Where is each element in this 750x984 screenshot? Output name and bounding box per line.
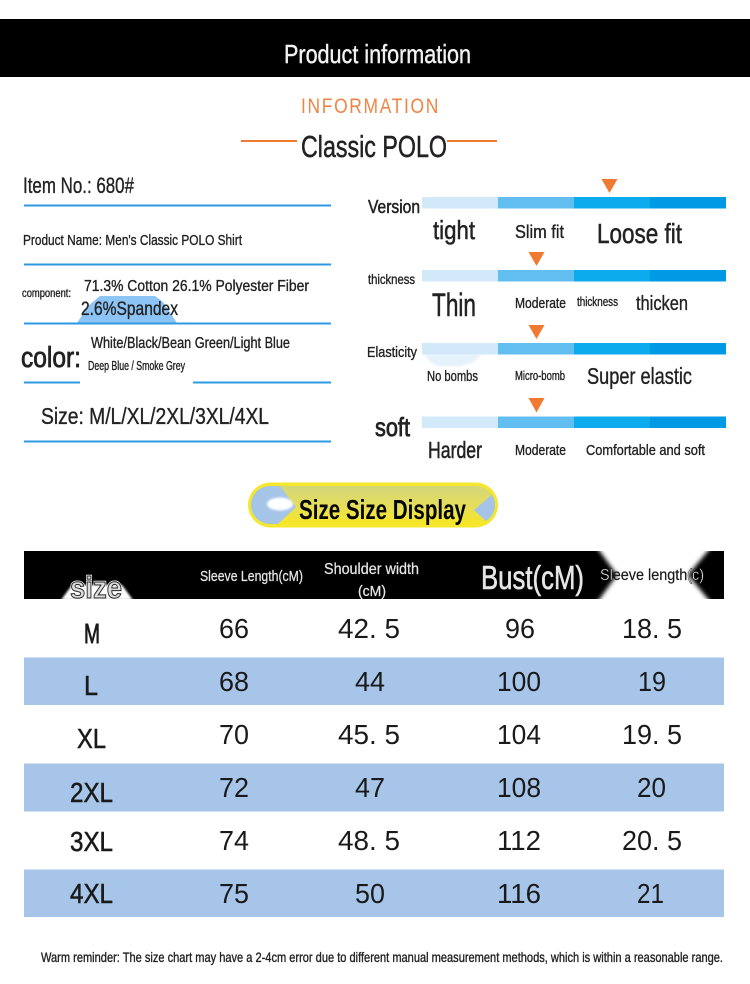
row: L: 100 bbox=[497, 666, 541, 697]
row: M: 66 bbox=[219, 613, 249, 644]
size display pill bbox=[248, 482, 500, 528]
row: 4XL: 116 bbox=[497, 878, 541, 909]
row: 4XL: 75 bbox=[219, 878, 249, 909]
row: 3XL bbox=[70, 825, 682, 857]
pill label: Size Size Display bbox=[299, 494, 466, 525]
row: XL: 104 bbox=[497, 719, 541, 750]
panel: fabric ratings bbox=[367, 179, 726, 463]
row: 4XL: 50 bbox=[355, 878, 385, 909]
rating: elasticity: Micro-bomb bbox=[515, 368, 565, 383]
row: XL: XL bbox=[77, 723, 106, 754]
column: short sleeve length: Sleeve length(c) bbox=[600, 567, 704, 584]
row: L: L bbox=[84, 670, 98, 701]
column: size: size bbox=[70, 570, 122, 605]
row: 2XL: 72 bbox=[219, 772, 249, 803]
rating: thickness: thickness bbox=[368, 271, 415, 287]
rating: thickness: Thin bbox=[432, 287, 476, 323]
rating: thickness: thickness bbox=[577, 294, 618, 309]
color value line one: White/Black/Bean Green/Light Blue bbox=[91, 335, 290, 352]
rating: softness: Moderate bbox=[515, 442, 566, 459]
row: 3XL: 74 bbox=[219, 825, 249, 856]
row: 4XL bbox=[24, 870, 724, 917]
rating: version: tight bbox=[433, 215, 476, 245]
row: 2XL bbox=[24, 764, 724, 812]
section heading bbox=[241, 95, 497, 164]
color value line two: Deep Blue / Smoke Grey bbox=[88, 358, 185, 373]
row: M: M bbox=[84, 618, 100, 649]
rating: elasticity bbox=[367, 325, 726, 389]
panel: product details bbox=[21, 173, 331, 442]
rating: elasticity: No bombs bbox=[427, 368, 478, 385]
component label: component: bbox=[22, 286, 71, 300]
rating: version: Version bbox=[368, 197, 420, 217]
product name: Product Name: Men's Classic POLO Shirt bbox=[23, 232, 243, 249]
component value line two: 2.6%Spandex bbox=[81, 299, 178, 320]
row: M: 42. 5 bbox=[338, 613, 400, 644]
rating: version: Slim fit bbox=[515, 222, 564, 242]
row: M: 18. 5 bbox=[622, 613, 682, 644]
rating: thickness: thicken bbox=[636, 293, 688, 315]
rating: softness bbox=[375, 398, 726, 463]
row: M: 96 bbox=[505, 613, 535, 644]
column: sleeve length: Sleeve Length(cM) bbox=[200, 568, 303, 585]
table header bbox=[24, 551, 724, 599]
row: XL bbox=[77, 719, 682, 754]
rating: softness: soft bbox=[375, 412, 411, 442]
blue highlight patch bbox=[77, 296, 177, 323]
row: 4XL: 21 bbox=[637, 878, 664, 909]
column: shoulder width bbox=[324, 561, 419, 600]
row: L bbox=[24, 658, 724, 705]
rating: thickness bbox=[368, 252, 726, 323]
row: 3XL: 3XL bbox=[70, 826, 113, 857]
column: size: size bbox=[70, 570, 122, 605]
header banner bbox=[0, 19, 750, 77]
eyebrow text: INFORMATION bbox=[301, 95, 440, 118]
row: 2XL: 2XL bbox=[70, 777, 113, 808]
column: shoulder width: Shoulder width bbox=[324, 561, 419, 578]
row: L: 44 bbox=[355, 666, 385, 697]
rating: version: Loose fit bbox=[597, 218, 682, 249]
rating: softness: Harder bbox=[428, 437, 482, 463]
row: 3XL: 20. 5 bbox=[622, 825, 682, 856]
row: XL: 45. 5 bbox=[338, 719, 400, 750]
rating: elasticity: Elasticity bbox=[367, 344, 417, 361]
row: M bbox=[84, 613, 682, 649]
row: 4XL: 4XL bbox=[70, 878, 113, 909]
row: XL: 70 bbox=[219, 719, 249, 750]
rating: elasticity: Super elastic bbox=[587, 363, 692, 389]
row: 2XL: 47 bbox=[355, 772, 385, 803]
row: 3XL: 48. 5 bbox=[338, 825, 400, 856]
row: 2XL: 108 bbox=[497, 772, 541, 803]
rating: thickness: Moderate bbox=[515, 295, 566, 312]
row: L: 19 bbox=[638, 666, 666, 697]
color label: color: bbox=[21, 342, 81, 374]
size table bbox=[24, 546, 724, 917]
banner title: Product information bbox=[284, 39, 471, 69]
column: bust: Bust(cM) bbox=[481, 559, 584, 596]
row: 2XL: 20 bbox=[637, 772, 666, 803]
column: shoulder width: (cM) bbox=[358, 583, 386, 600]
component value line one: 71.3% Cotton 26.1% Polyester Fiber bbox=[84, 278, 310, 295]
item number: Item No.: 680# bbox=[23, 173, 135, 198]
row: L: 68 bbox=[219, 666, 249, 697]
row: XL: 19. 5 bbox=[622, 719, 682, 750]
right heading rule bbox=[447, 140, 497, 142]
size list: Size: M/L/XL/2XL/3XL/4XL bbox=[41, 403, 269, 429]
left heading rule bbox=[241, 140, 297, 142]
row: 3XL: 112 bbox=[497, 825, 541, 856]
heading text: Classic POLO bbox=[301, 129, 447, 164]
rating: version bbox=[368, 179, 726, 249]
rating: softness: Comfortable and soft bbox=[586, 442, 706, 459]
